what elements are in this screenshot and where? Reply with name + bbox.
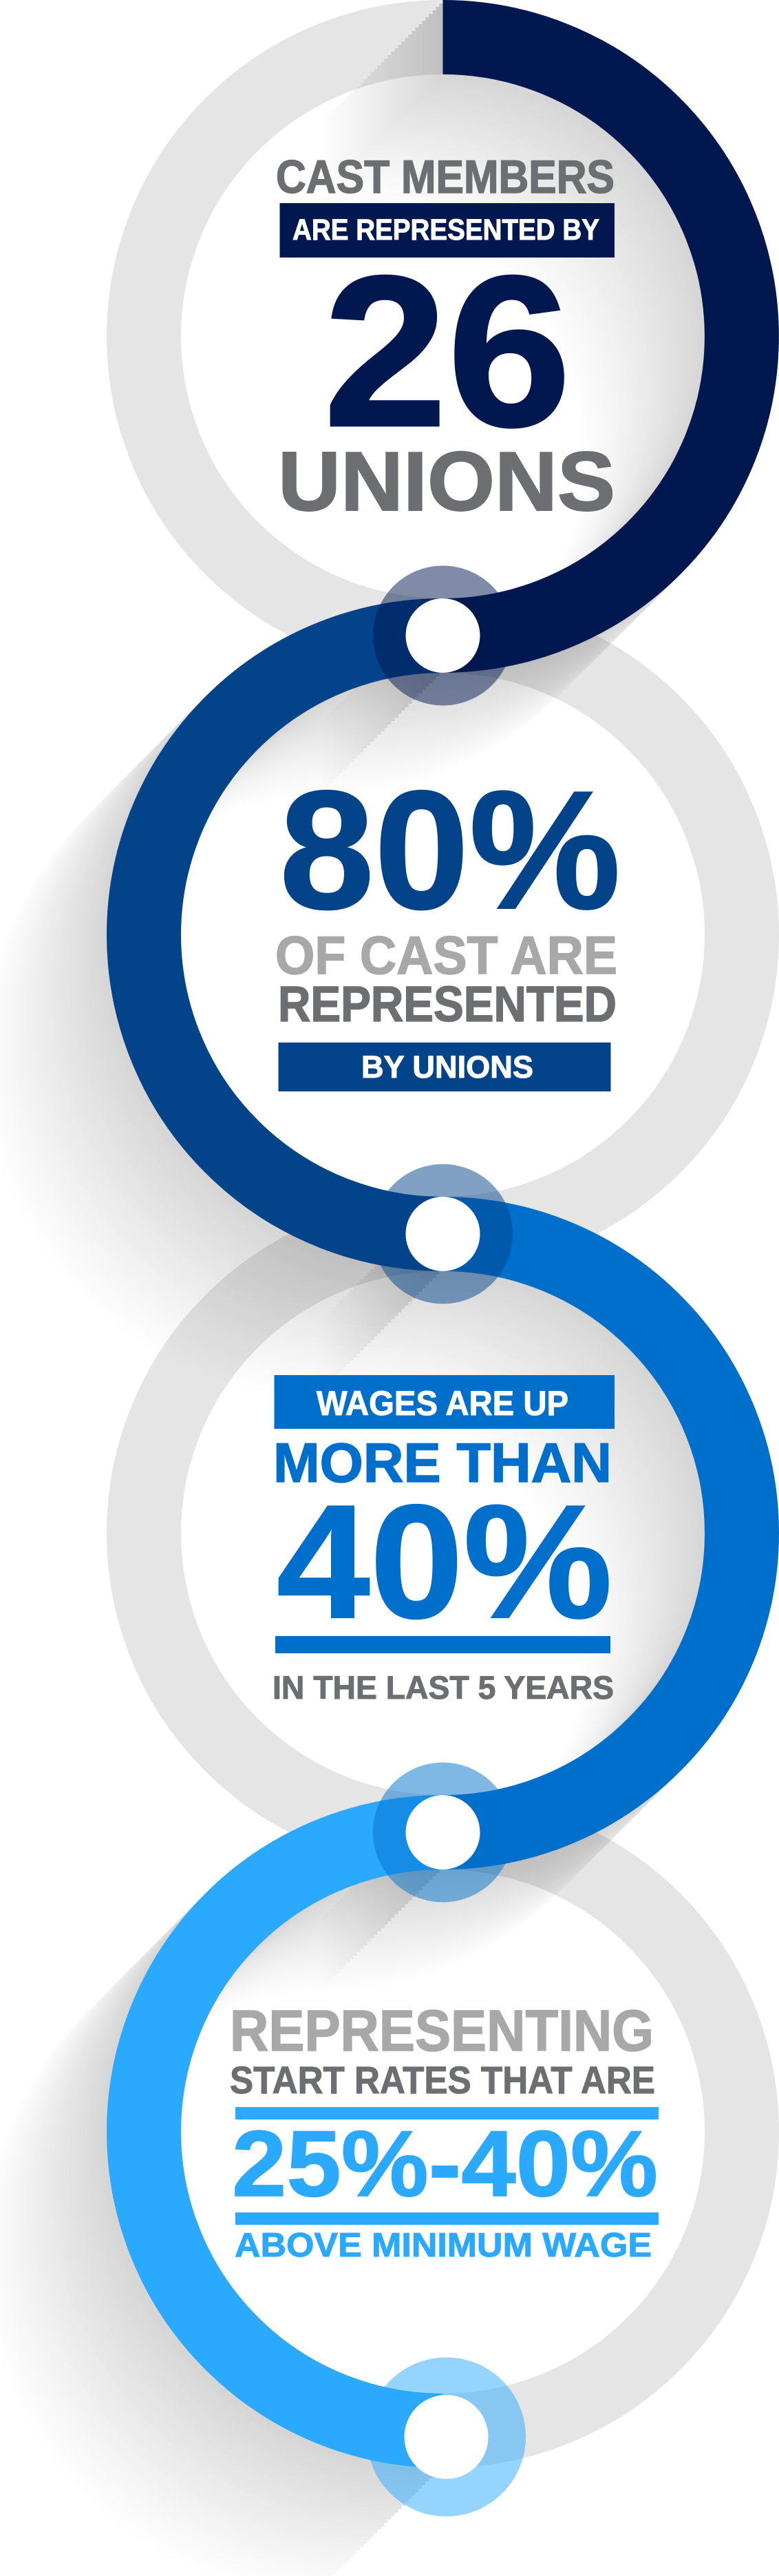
banner: wages are up [274,1375,615,1429]
banner: are represented by: ARE REPRESENTED BY [292,213,599,247]
node halo 1 [373,566,513,705]
arc 2: royal blue [144,636,443,1234]
bottom bar [235,2212,659,2225]
banner: are represented by [279,203,615,258]
text: represented: REPRESENTED [278,977,617,1032]
panel: 80 percent [275,755,621,1091]
text: of cast are: OF CAST ARE [275,925,617,985]
text: cast members: CAST MEMBERS [276,151,615,203]
long shadow: arc 3 [319,1234,742,1956]
long shadow: arc 2 [20,636,443,1358]
banner: by unions: BY UNIONS [361,1049,533,1085]
big range 25%-40%: 25%-40% [232,2111,658,2216]
big number 26: 26 [323,232,571,472]
node hole 2 [406,1197,480,1271]
banner: wages are up: WAGES ARE UP [317,1384,568,1423]
text: start rates that are: START RATES THAT ARE [230,2058,655,2102]
arc 4: light blue [144,1832,443,2431]
arc 1: navy [443,37,742,636]
big number 80%: 80% [279,755,621,944]
node halo 3 [373,1763,513,1902]
top bar [235,2107,659,2119]
text: unions: UNIONS [278,434,615,528]
divider bar [275,1636,610,1653]
long shadow: arc 4 [20,1832,443,2555]
text: above minimum wage: ABOVE MINIMUM WAGE [235,2227,652,2264]
node halo 2 [373,1164,513,1304]
node hole 3 [406,1795,480,1870]
panel: 40 percent [273,1375,615,1706]
text: in the last 5 years: IN THE LAST 5 YEARS [273,1669,614,1706]
panel: 26 unions [276,151,615,528]
node hole 1 [406,598,480,673]
arc 3: mid blue [443,1234,742,1832]
panel: start rates [230,1998,659,2264]
long shadow: arc 1 [319,37,742,760]
node hole 4 [405,2395,489,2479]
grey background rings [144,37,742,2431]
big number 40%: 40% [277,1471,612,1652]
banner: by unions [278,1043,611,1091]
text: more than: MORE THAN [273,1432,612,1494]
node halo 4 [367,2358,526,2516]
text: representing: REPRESENTING [230,1998,654,2063]
